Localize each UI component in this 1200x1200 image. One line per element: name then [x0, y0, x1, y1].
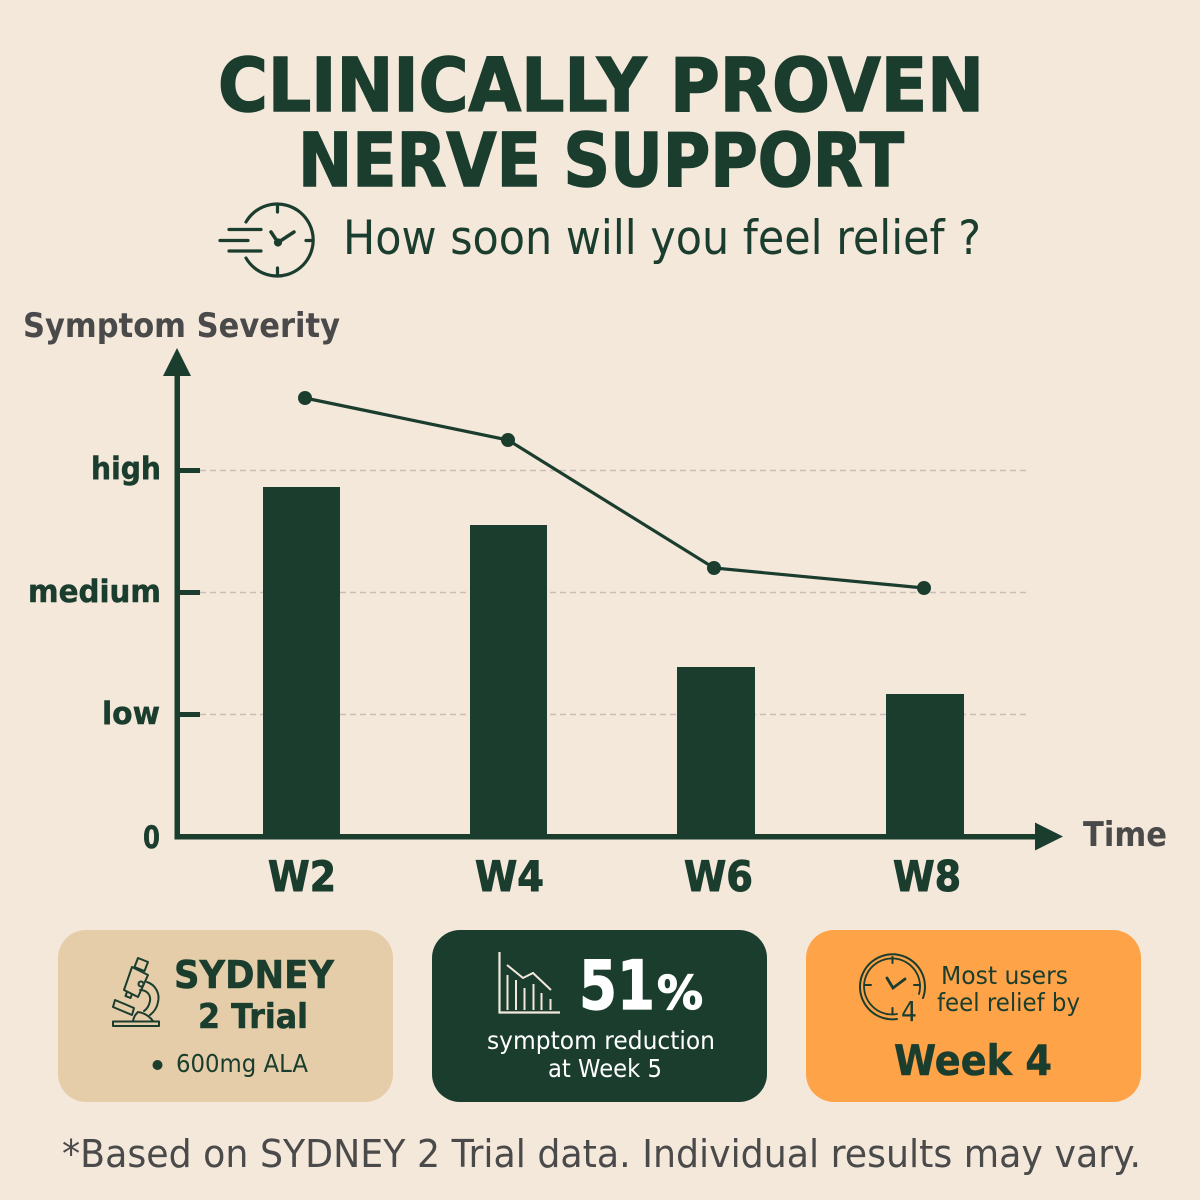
card text — [937, 961, 1080, 1017]
panel: 51% symptom reduction — [432, 930, 767, 1102]
icon: fast clock — [220, 204, 313, 276]
x axis labels: W4 — [475, 852, 544, 901]
card heading: SYDNEY — [174, 953, 334, 997]
y axis labels — [28, 451, 161, 856]
x axis labels: W8 — [893, 852, 961, 901]
panel: SYDNEY 2 Trial — [58, 930, 393, 1102]
icon: declining chart — [500, 952, 560, 1012]
card heading — [174, 953, 334, 1037]
title: CLINICALLY PROVEN — [218, 43, 984, 129]
x axis title: Time — [1083, 815, 1167, 855]
bar chart — [28, 348, 1167, 901]
bars — [263, 487, 964, 837]
x axis labels: W6 — [684, 852, 753, 901]
card text: symptom reduction — [487, 1026, 715, 1055]
icon: clock with 4: 4 — [901, 995, 917, 1028]
big number: % — [657, 966, 703, 1020]
y axis labels: 0 — [143, 820, 160, 856]
axes and arrows — [163, 348, 1063, 850]
card text: feel relief by — [937, 988, 1080, 1017]
x axis labels — [268, 852, 961, 901]
y axis title: Symptom Severity — [23, 306, 340, 346]
panel: relief by week 4 — [806, 930, 1141, 1102]
card heading: 2 Trial — [198, 997, 308, 1037]
trend line — [298, 391, 931, 595]
x axis labels: W2 — [268, 852, 336, 901]
title: NERVE SUPPORT — [298, 118, 904, 204]
footnote: *Based on SYDNEY 2 Trial data. Individual results may vary. — [62, 1132, 1141, 1176]
icon: microscope — [113, 958, 159, 1026]
card text: at Week 5 — [548, 1054, 662, 1083]
subtitle: How soon will you feel relief ? — [343, 211, 981, 266]
card text — [487, 1026, 715, 1083]
big number: 51 — [579, 947, 655, 1026]
bullet text: 600mg ALA — [176, 1049, 308, 1078]
gridlines — [200, 470, 1026, 714]
y axis labels: low — [102, 696, 160, 732]
y axis labels: high — [91, 451, 161, 487]
y axis labels: medium — [28, 574, 161, 610]
card text: Most users — [941, 961, 1068, 990]
card highlight: Week 4 — [894, 1036, 1052, 1085]
icon: clock with 4 — [860, 954, 925, 1028]
title — [218, 43, 984, 204]
